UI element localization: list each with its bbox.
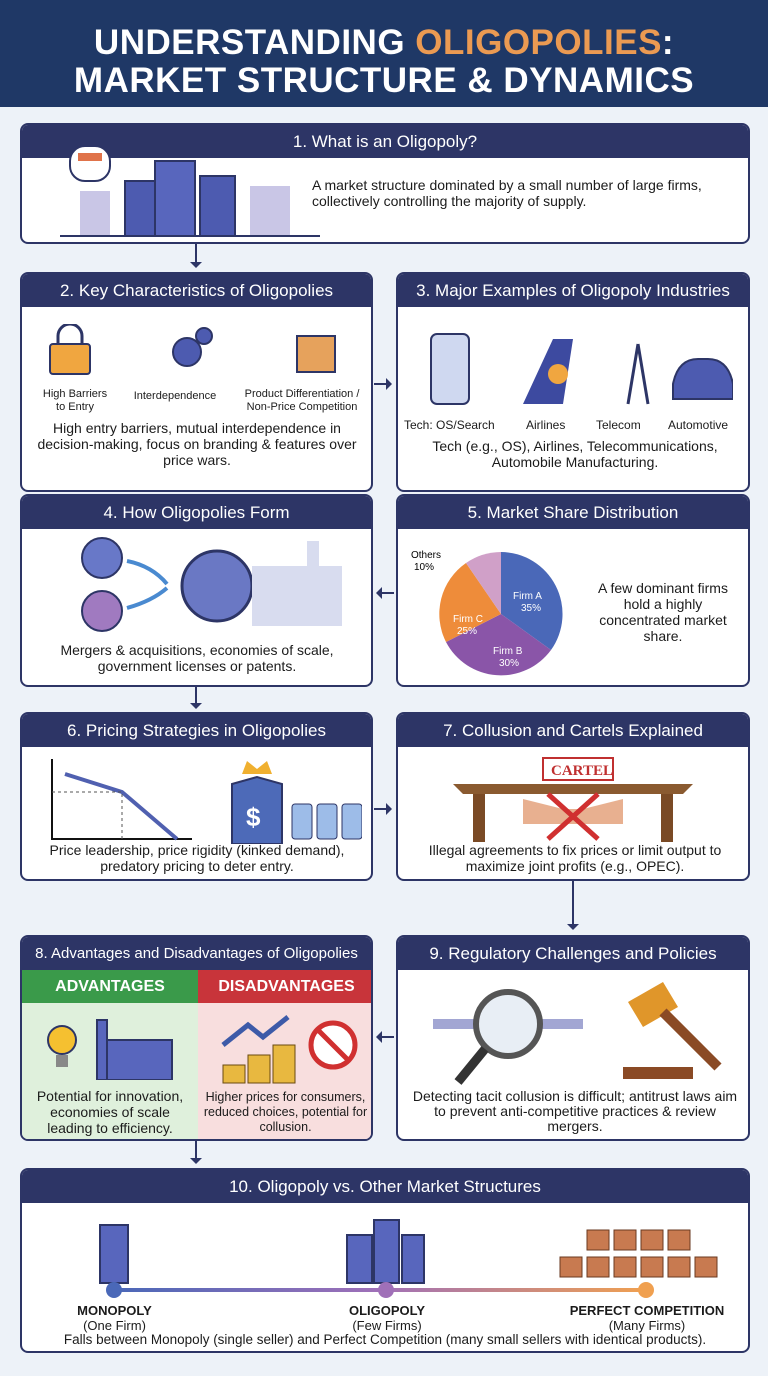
icon: price tags: $: [246, 802, 261, 832]
pie chart: Others: [411, 550, 441, 561]
icons: lock gears box: [49, 324, 336, 375]
panel: examples: Airlines: [526, 418, 565, 432]
arrow 4 to 6: [195, 687, 197, 706]
description 7: Illegal agreements to fix prices or limit output to maximize joint profits (e.g., OPEC).: [429, 842, 721, 874]
spectrum line: [106, 1282, 654, 1298]
heading 6: [22, 714, 371, 747]
icon: bulb and factory: [47, 1019, 173, 1080]
description 2: High entry barriers, mutual interdependence in decision-making, focus on branding & features over price wars.: [37, 420, 357, 468]
panel: pricing: [20, 712, 373, 881]
pie chart: Firm C: [453, 614, 483, 625]
heading 5: 5. Market Share Distribution: [468, 503, 678, 522]
heading 2: [22, 274, 371, 307]
icons: buildings and shops: [99, 1219, 718, 1284]
pie chart: 30%: [499, 658, 519, 669]
heading 6: 6. Pricing Strategies in Oligopolies: [67, 721, 326, 740]
pie chart: [411, 550, 562, 676]
description 9: Detecting tacit collusion is difficult; antitrust laws aim to prevent anti-competitive practices & review mergers.: [413, 1088, 737, 1134]
title: MARKET STRUCTURE & DYNAMICS: [74, 61, 694, 100]
panel: comparison: (Many Firms): [609, 1318, 685, 1333]
panel: examples: Automotive: [668, 418, 728, 432]
disadvantages column: DISADVANTAGES: [218, 978, 355, 995]
arrow 7 to 9: [572, 881, 574, 927]
pie chart: Firm B: [493, 646, 523, 657]
heading 4: [22, 496, 371, 529]
description 4: Mergers & acquisitions, economies of scale, government licenses or patents.: [60, 642, 334, 674]
heading 4: 4. How Oligopolies Form: [103, 503, 290, 522]
advantages column: [22, 970, 198, 1143]
panel: comparison: OLIGOPOLY: [349, 1303, 425, 1318]
description 10: Falls between Monopoly (single seller) and Perfect Competition (many small sellers with identical products).: [64, 1332, 706, 1347]
panel: market share: [396, 494, 750, 687]
heading 10: 10. Oligopoly vs. Other Market Structures: [229, 1177, 541, 1196]
disadvantages column: Higher prices for consumers, reduced choices, potential for collusion.: [204, 1090, 367, 1134]
heading 9: 9. Regulatory Challenges and Policies: [429, 944, 717, 963]
panel: characteristics: [20, 272, 373, 492]
panel: characteristics: Non-Price Competition: [247, 401, 357, 413]
arrow 6 to 7: [374, 808, 388, 810]
arrow 2 to 3: [374, 383, 388, 385]
icon: city skyline: [60, 147, 320, 237]
pie chart: Firm A: [513, 591, 542, 602]
icon: price tags: [231, 761, 362, 844]
heading 3: 3. Major Examples of Oligopoly Industries: [416, 281, 730, 300]
heading 2: 2. Key Characteristics of Oligopolies: [60, 281, 333, 300]
arrow 1 to 2: [195, 244, 197, 266]
panel: examples: [396, 272, 750, 492]
panel: comparison: [20, 1168, 750, 1353]
description 1: collectively controlling the majority of supply.: [312, 193, 586, 209]
heading 9: [398, 937, 748, 970]
panel: collusion: [396, 712, 750, 881]
disadvantages column: [198, 970, 375, 1143]
heading 3: [398, 274, 748, 307]
icon: cartel table handshake: [453, 757, 693, 842]
description 5: A few dominant firms hold a highly concentrated market share.: [598, 580, 728, 644]
heading 8: [22, 937, 371, 970]
labels: [43, 388, 107, 413]
icons: phone, plane tail, tower, car: [430, 333, 733, 405]
panel: how form: [20, 494, 373, 687]
heading 7: [398, 714, 748, 747]
panel: regulatory: [396, 935, 750, 1141]
panel: what is an oligopoly: [20, 123, 750, 244]
advantages column: ADVANTAGES: [55, 978, 165, 995]
panel: examples: Telecom: [596, 418, 641, 432]
description 3: Tech (e.g., OS), Airlines, Telecommunications, Automobile Manufacturing.: [432, 438, 718, 470]
labels: [77, 1303, 152, 1333]
heading 10: [22, 1170, 748, 1203]
panel: characteristics: Interdependence: [134, 390, 216, 402]
pie chart: 10%: [414, 562, 434, 573]
title: [0, 0, 768, 107]
description 1: [312, 177, 702, 209]
labels: (One Firm): [83, 1318, 146, 1333]
arrow 5 to 4: [380, 592, 394, 594]
labels: Tech: OS/Search: [404, 418, 495, 432]
panel: comparison: PERFECT COMPETITION: [570, 1303, 724, 1318]
labels: to Entry: [56, 401, 94, 413]
chart: kinked demand: [51, 759, 192, 840]
heading 1: 1. What is an Oligopoly?: [293, 132, 477, 151]
panel: characteristics: Product Differentiation /: [245, 388, 359, 400]
icon: magnifier and gavel: [433, 982, 722, 1085]
advantages column: Potential for innovation, economies of scale leading to efficiency.: [37, 1088, 183, 1136]
arrow 8 to 10: [195, 1141, 197, 1161]
description 1: A market structure dominated by a small number of large firms,: [312, 177, 702, 193]
heading 1: [22, 125, 748, 158]
arrow 9 to 8: [380, 1036, 394, 1038]
panel: comparison: (Few Firms): [352, 1318, 422, 1333]
pie chart: 25%: [457, 626, 477, 637]
icon: cartel table handshake: CARTEL: [551, 763, 613, 779]
labels: High Barriers: [43, 388, 107, 400]
heading 8: 8. Advantages and Disadvantages of Oligopolies: [35, 945, 358, 962]
description 6: Price leadership, price rigidity (kinked demand), predatory pricing to deter entry.: [50, 842, 344, 874]
title: UNDERSTANDING OLIGOPOLIES:: [94, 23, 674, 62]
heading 5: [398, 496, 748, 529]
labels: MONOPOLY: [77, 1303, 152, 1318]
icon: coins and rising arrow: [222, 1015, 358, 1084]
pie chart: 35%: [521, 603, 541, 614]
panel: advantages/disadvantages: [20, 935, 373, 1141]
heading 7: 7. Collusion and Cartels Explained: [443, 721, 703, 740]
icon: merger: [81, 537, 342, 632]
